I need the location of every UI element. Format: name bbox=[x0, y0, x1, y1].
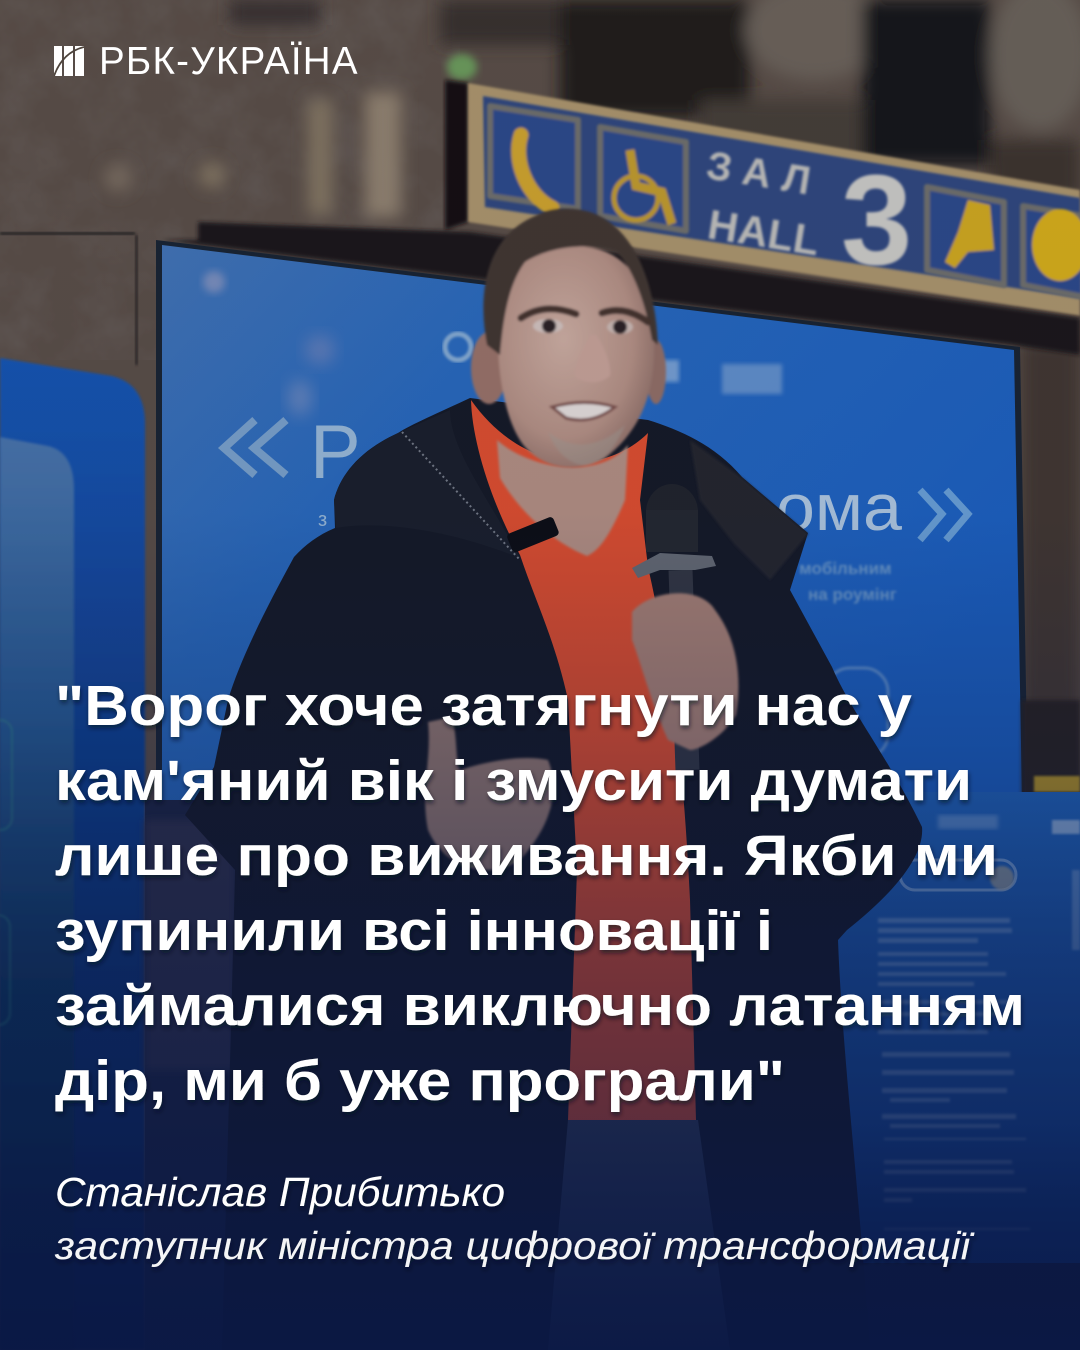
quote text: займалися виключно латанням bbox=[55, 974, 1025, 1038]
yellow strip and dark gap behind the stand bbox=[1022, 700, 1080, 800]
quote text: дір, ми б уже програли" bbox=[55, 1049, 785, 1113]
blue event screen: Р bbox=[310, 410, 361, 495]
blue event screen bbox=[156, 240, 1028, 800]
logo mark bbox=[54, 46, 84, 76]
dark lower wall behind speaker bbox=[145, 800, 845, 1350]
quote text: лише про виживання. Якби ми bbox=[55, 824, 998, 888]
kiosk inner screen bbox=[0, 437, 74, 1350]
right information stand bbox=[838, 792, 1080, 1350]
quote text: кам'яний вік і змусити думати bbox=[55, 749, 972, 813]
gesturing hand bbox=[425, 717, 553, 870]
speaker bbox=[185, 209, 922, 1350]
attribution: speaker name and position: Станіслав Прибитько bbox=[55, 1169, 505, 1215]
icon: yellow symbol bbox=[1023, 206, 1080, 297]
neck bbox=[497, 440, 628, 556]
blue event screen: на роумінг bbox=[808, 585, 897, 604]
microphone bbox=[632, 484, 716, 770]
attribution: speaker name and position: заступник міністра цифрової трансформації bbox=[54, 1225, 975, 1268]
quote text: зупинили всі інновації і bbox=[55, 899, 773, 963]
hood folds bbox=[334, 410, 520, 558]
hall sign: 3 bbox=[841, 149, 912, 292]
logo wordmark: РБК-УКРАЇНА bbox=[99, 40, 359, 83]
hall sign bbox=[445, 80, 1080, 316]
jeans bbox=[548, 1120, 730, 1350]
kiosk buttons bbox=[0, 720, 12, 1025]
dark beam above the screen bbox=[162, 222, 1080, 355]
blue event screen: з bbox=[318, 509, 327, 531]
quote text: "Ворог хоче затягнути нас у bbox=[55, 674, 912, 738]
icon: telephone bbox=[490, 106, 578, 209]
logo: РБК-Україна bbox=[54, 40, 359, 83]
hoodie bbox=[471, 400, 696, 1120]
head bbox=[471, 209, 666, 467]
hall sign: ЗАЛ bbox=[704, 143, 825, 205]
jacket bbox=[185, 398, 922, 1350]
left blue kiosk bbox=[0, 358, 145, 1350]
lapel mic bbox=[506, 516, 560, 553]
icon: hand bbox=[927, 187, 1004, 285]
icon: wheelchair bbox=[600, 127, 686, 231]
jacket collar bbox=[690, 440, 808, 580]
blue event screen: ома bbox=[776, 470, 902, 544]
hand holding microphone bbox=[632, 593, 738, 750]
jacket zipper bbox=[402, 432, 520, 560]
hall sign: HALL bbox=[705, 200, 823, 264]
blue event screen: ся мобільним bbox=[775, 559, 892, 578]
